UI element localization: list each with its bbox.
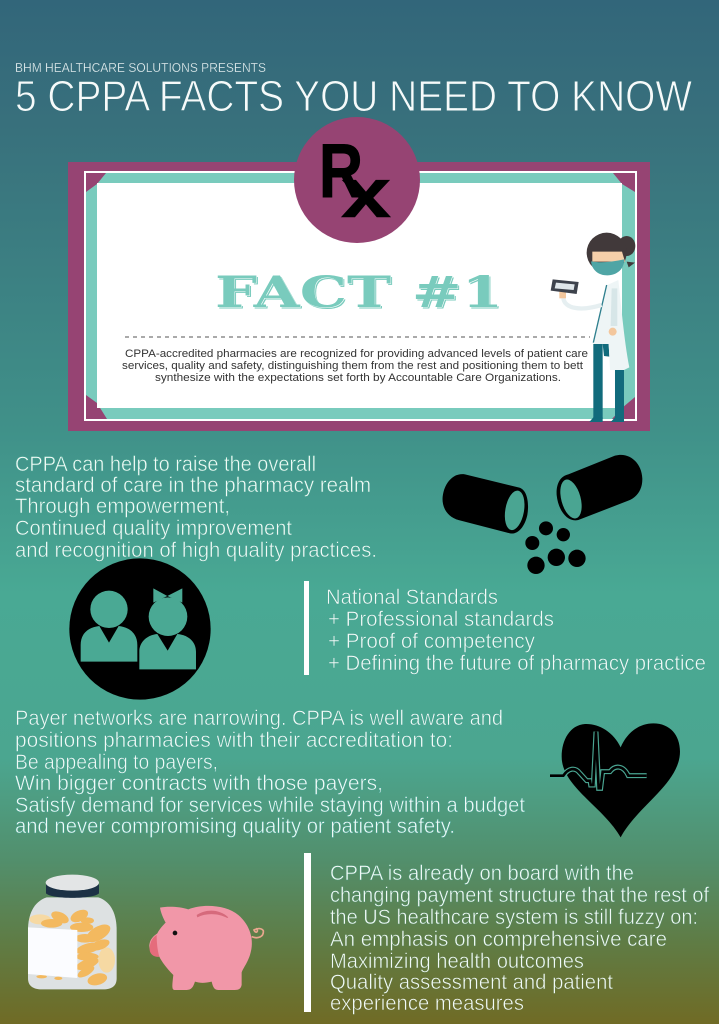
text block: national standards: + Defining the future of pharmacy practice [328,652,706,675]
text block: payment structure: the US healthcare system is still fuzzy on: [330,906,698,929]
text block: payer networks [15,707,525,838]
fact description: CPPA-accredited pharmacies are recognized for providing advanced levels of patient care [125,348,588,360]
icon: doctor [551,233,635,422]
fact heading: FACT #1 [216,268,504,318]
fact description: synthesize with the expectations set forth by Accountable Care Organizations. [155,372,561,384]
text block: payer networks: Be appealing to payers, [15,751,218,774]
text block: raise standard of care: and recognition of high quality practices. [15,539,377,562]
text block: payer networks: positions pharmacies with their accreditation to: [15,729,453,752]
panel: fact 1 card [68,117,650,431]
text block: raise standard of care [15,453,377,562]
text block: payer networks: Payer networks are narrowing. CPPA is well aware and [15,707,503,730]
fact heading: FACT #1 [215,268,503,318]
rx badge [294,117,420,243]
corner accents [86,173,635,419]
text block: payer networks: Win bigger contracts with those payers, [15,772,383,795]
text block: national standards: + Professional standards [328,608,554,631]
text block: national standards: National Standards [326,586,498,609]
text block: payment structure [330,862,709,1015]
icon: coin jar [28,875,117,989]
text block: payment structure: CPPA is already on board with the [330,862,634,885]
text block: payment structure: Maximizing health outcomes [330,950,584,973]
text block: payment structure: An emphasis on comprehensive care [330,928,667,951]
divider: national standards [304,581,309,675]
icon: piggy bank [149,906,263,990]
text block: national standards: + Proof of competency [328,630,535,653]
fact heading [215,268,504,320]
text block: raise standard of care: Continued quality improvement [15,517,292,540]
text block: payment structure: experience measures [330,992,524,1015]
text block: payer networks: and never compromising quality or patient safety. [15,815,455,838]
text block: raise standard of care: CPPA can help to raise the overall [15,453,316,476]
subtitle: BHM HEALTHCARE SOLUTIONS PRESENTS [15,61,266,75]
text block: payer networks: Satisfy demand for services while staying within a budget [15,794,525,817]
fact description: services, quality and safety, distinguishing them from the rest and positioning them to bett [122,360,583,372]
rx badge: x [341,154,391,232]
icon: people in circle [69,558,211,700]
text block: payment structure: changing payment structure that the rest of [330,884,709,907]
fact heading: FACT #1 [216,270,504,320]
text block: raise standard of care: standard of care in the pharmacy realm [15,474,371,497]
fact description [122,348,588,384]
rx badge: R [319,129,363,214]
divider: payment structure [304,853,311,1012]
text block: raise standard of care: Through empowerment, [15,495,230,518]
icon: heart with ecg [550,723,680,837]
icon: capsule [443,455,642,574]
text block: payment structure: Quality assessment and patient [330,971,613,994]
text block: national standards [326,586,706,675]
